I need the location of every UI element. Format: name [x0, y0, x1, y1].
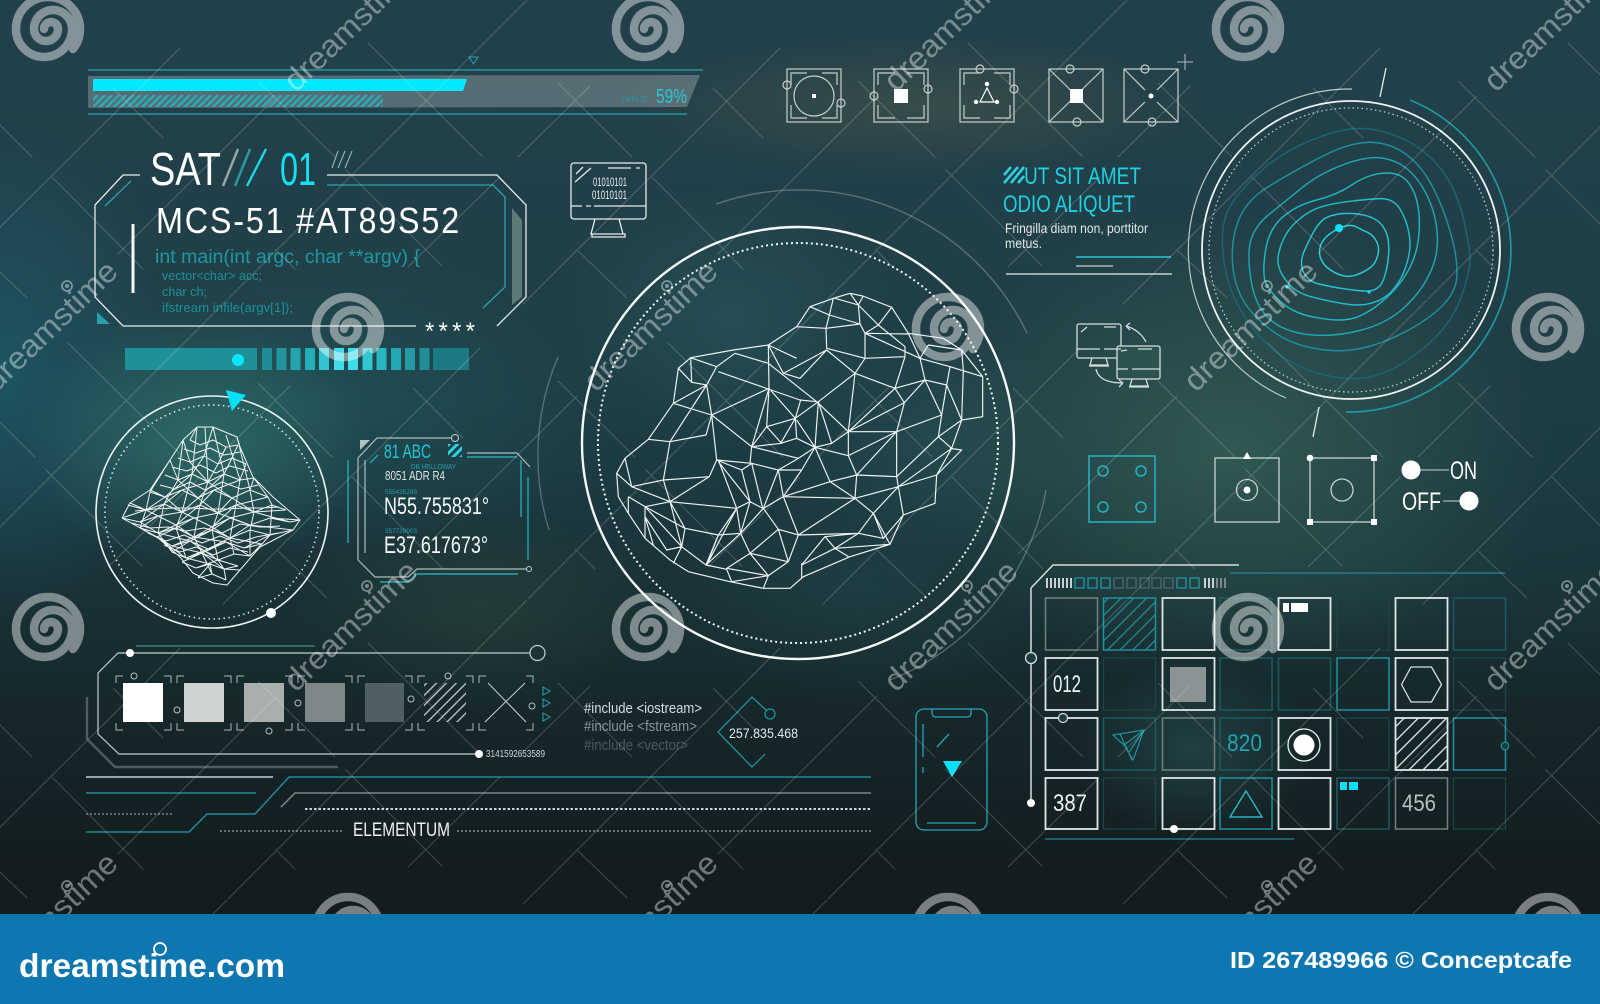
cells row 4 — [1046, 778, 1506, 833]
footer credit: ID 267489966 © Conceptcafe — [1230, 947, 1572, 973]
readout value: 257.835.468 — [729, 725, 798, 741]
watermark text: dreamstime — [277, 553, 425, 698]
target square — [1215, 452, 1279, 522]
outer arcs — [538, 190, 1046, 680]
include lines: #include <vector> — [584, 737, 688, 754]
small white rects — [1283, 603, 1308, 612]
value 456: 456 — [1402, 790, 1436, 817]
frame lines — [358, 438, 530, 577]
hatch mark — [1004, 167, 1024, 183]
terrain mesh — [122, 427, 300, 585]
globe ring — [582, 227, 1014, 659]
corner triangle — [97, 312, 110, 324]
value 387: 387 — [1053, 790, 1087, 817]
hatched progress — [93, 95, 383, 107]
watermark text: dreamstime — [877, 553, 1025, 698]
contour markers — [1335, 224, 1343, 232]
radio circle — [1288, 729, 1320, 761]
progress fill — [93, 79, 467, 91]
include lines: #include <iostream> — [584, 700, 702, 717]
small triangle marker — [469, 57, 478, 64]
cells row 2 — [1046, 658, 1506, 710]
watermark text: dreamstime — [577, 845, 725, 990]
teal triangle — [1230, 791, 1262, 817]
panel: SAT 01 code frame — [95, 143, 526, 345]
teal four-dot square — [1089, 456, 1155, 522]
icon: cross dot — [1124, 65, 1178, 126]
outer rings — [1188, 89, 1352, 398]
cyan small rects — [1340, 782, 1358, 790]
main globe — [538, 190, 1046, 680]
label 81 ABC: 81 ABC — [384, 442, 431, 463]
watermark text: dreamstime — [577, 253, 725, 398]
heading chip id: MCS-51 #AT89S52 — [156, 200, 461, 241]
toggle off: OFF — [1402, 488, 1441, 516]
teal triangles — [543, 687, 550, 721]
contour globe — [1188, 68, 1511, 437]
icon: triangle target — [960, 65, 1018, 122]
percentage: 59% — [656, 86, 687, 108]
footer logo mark — [154, 943, 166, 955]
segmented level bar — [125, 348, 469, 370]
icon: phone — [916, 709, 987, 830]
cyan triangle — [943, 761, 962, 777]
toggles: ON — [1450, 457, 1477, 485]
watermark text: dreamstime — [1177, 253, 1325, 398]
handle dot — [1170, 825, 1178, 833]
top tick strip — [1047, 578, 1225, 588]
ticks — [1313, 68, 1386, 437]
text block: metus. — [1005, 235, 1042, 251]
icon: paper plane — [1113, 730, 1144, 760]
cells row 1 — [1046, 598, 1506, 650]
octagon outline — [95, 175, 526, 326]
corner ornaments — [360, 440, 370, 450]
asteroid mesh — [617, 293, 983, 588]
label elementum: ELEMENTUM — [353, 820, 450, 841]
heading: UT SIT AMET — [1024, 163, 1141, 190]
wireframe globe small — [96, 390, 328, 628]
longitude: E37.617673° — [384, 532, 488, 559]
plus sign — [1177, 54, 1193, 70]
code lines: char ch; — [162, 284, 207, 299]
grey swatches — [123, 683, 163, 722]
latitude: N55.755831° — [384, 493, 489, 520]
handle square — [1307, 455, 1377, 525]
body text: Fringilla diam non, porttitor — [1005, 220, 1148, 236]
cells row 3 — [1046, 714, 1509, 770]
toggles — [1402, 457, 1478, 516]
icon: square target — [870, 69, 932, 122]
bottom circuit lines — [86, 777, 871, 832]
frame — [98, 653, 530, 754]
title number: 01 — [280, 143, 316, 195]
number label: 3141592653589 — [486, 749, 545, 760]
small circles — [131, 673, 535, 734]
hatch swatch — [424, 683, 466, 722]
icon row — [783, 54, 1193, 126]
watermark text: dreamstime — [1177, 845, 1325, 990]
contour lines — [1222, 128, 1470, 379]
panel: cell grid — [1026, 565, 1509, 839]
footer logo: dreamstime.com — [19, 947, 285, 984]
value 012: 012 — [1053, 671, 1081, 698]
asterisks: **** — [425, 318, 475, 345]
data label: DATA:32 — [622, 95, 648, 104]
hatch chip — [448, 444, 462, 457]
white vertical bar — [132, 224, 134, 293]
small label: 555435299 — [385, 490, 418, 496]
code lines: vector<char> acc; — [162, 268, 262, 283]
label hello: DB HELLOWAY — [411, 462, 456, 471]
footer band — [0, 914, 1600, 1004]
icon: cross square — [1049, 65, 1103, 126]
monitor icon binary — [571, 163, 646, 237]
code lines: int main(int argc, char **argv) { — [155, 247, 421, 268]
value 820: 820 — [1227, 730, 1262, 757]
panel: swatches — [87, 646, 550, 767]
icon: monitors sync — [1077, 323, 1160, 387]
swatch brackets — [116, 676, 533, 730]
rail circles — [1058, 714, 1068, 722]
text block — [1003, 163, 1172, 274]
text block: ODIO ALIQUET — [1003, 191, 1135, 218]
icon: circle target — [783, 69, 845, 122]
panel: coordinates — [348, 434, 532, 582]
code lines — [155, 247, 421, 315]
title SAT: SAT — [150, 143, 221, 195]
white handle — [266, 608, 276, 618]
globe circles — [96, 396, 328, 628]
side grey bar — [512, 208, 522, 305]
label ADR: 8051 ADR R4 — [385, 468, 445, 483]
top progress bar — [88, 57, 703, 114]
small label: 357739903 — [385, 529, 418, 535]
grid rail — [1031, 565, 1239, 799]
toggle on — [1402, 460, 1420, 480]
hexagon — [1402, 667, 1442, 702]
monitor icon binary: 01010101 — [592, 188, 627, 202]
rule lines — [1076, 256, 1171, 258]
binary text: 01010101 — [593, 175, 627, 189]
diamond readout — [718, 697, 798, 767]
dotted ring — [598, 243, 998, 643]
cross swatch — [485, 683, 526, 722]
inner teal line — [105, 181, 505, 308]
include lines: #include <fstream> — [584, 718, 697, 735]
code lines: ifstream infile(argv[1]); — [162, 300, 293, 315]
grey square — [1170, 667, 1206, 702]
small slashes — [332, 151, 352, 168]
include lines — [584, 700, 702, 754]
progress track — [88, 75, 700, 108]
title slashes — [223, 149, 266, 186]
cyan pointer — [226, 390, 246, 411]
level dot — [232, 354, 244, 366]
